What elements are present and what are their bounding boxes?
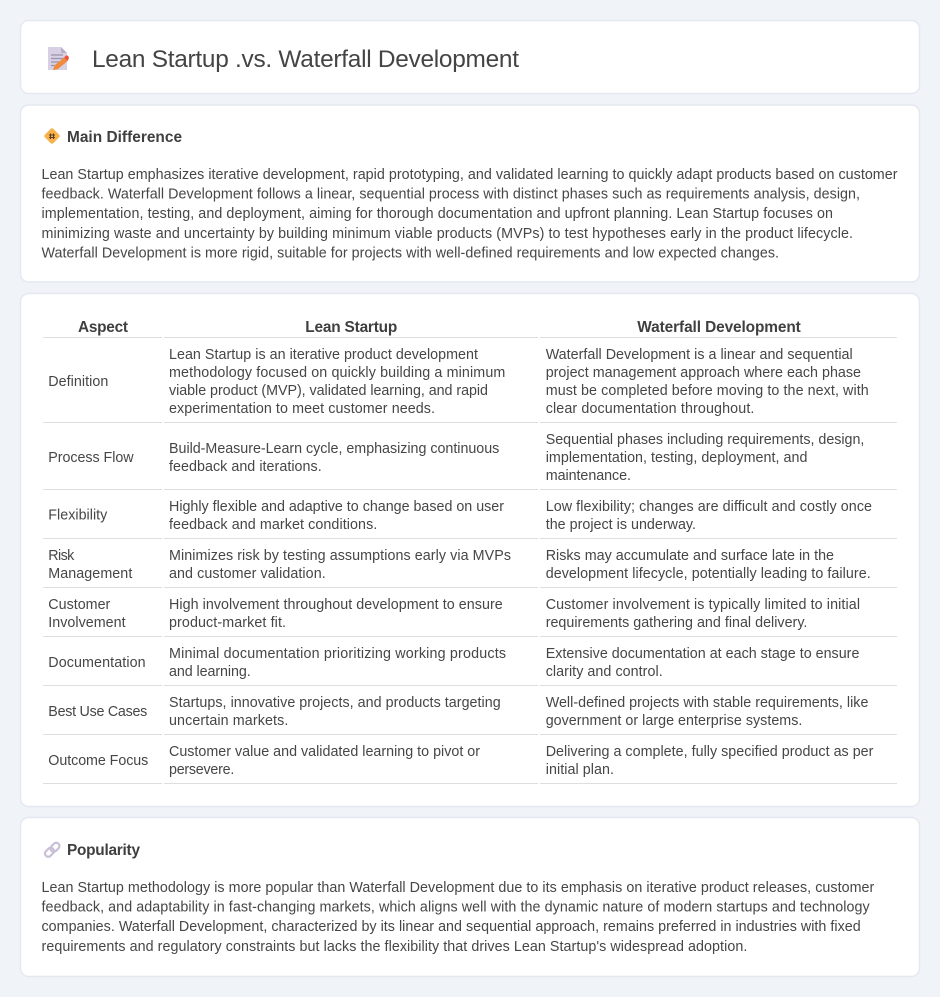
row: customer involvement: product-market fit.	[169, 615, 286, 631]
title: Lean Startup .vs. Waterfall Development	[92, 46, 519, 73]
panel: main difference	[20, 105, 920, 282]
row: documentation: clarity and control.	[546, 664, 663, 680]
row: flexibility: Low flexibility; changes are difficult and costly once	[546, 499, 872, 515]
icon: chain link	[44, 841, 61, 858]
row: definition: viable product (MVP), validated learning, and rapid	[169, 383, 488, 399]
table header row: Aspect	[78, 319, 128, 336]
text block: popularity: Lean Startup methodology is more popular than Waterfall Development due to its emphasis on iterative product releases, customer	[42, 880, 875, 896]
row: risk management: Risk	[48, 548, 75, 564]
row: best use cases	[43, 695, 897, 735]
row: process flow: implementation, testing, deployment, and	[546, 450, 807, 466]
row: documentation: and learning.	[169, 664, 251, 680]
row: risk management: and customer validation.	[169, 566, 326, 582]
row: definition: Lean Startup is an iterative product development	[169, 347, 478, 363]
row: risk management	[43, 548, 897, 588]
row: outcome focus	[43, 744, 897, 784]
text block: popularity	[42, 880, 875, 955]
row: flexibility: Highly flexible and adaptive to change based on user	[169, 499, 504, 515]
row: customer involvement: Involvement	[48, 615, 126, 631]
text block: main difference: implementation, testing, and deployment, aiming for thorough documentation and upfront planning. Lean Startup focuses on	[42, 206, 833, 222]
row: definition: clear documentation throughout.	[546, 401, 754, 417]
text block: popularity: companies. Waterfall Development, characterized by its linear and sequential approach, remains preferred in industries with fixed	[42, 919, 861, 935]
row: definition	[43, 347, 897, 423]
row: definition: methodology focused on quickly building a minimum	[169, 365, 505, 381]
row: best use cases: Best Use Cases	[48, 704, 147, 720]
icon: orange diamond	[44, 128, 60, 144]
heading: popularity: Popularity	[67, 842, 140, 859]
row: best use cases: government or large enterprise systems.	[546, 713, 802, 729]
icon: document with pencil	[48, 47, 69, 70]
row: process flow: Sequential phases including requirements, design,	[546, 432, 864, 448]
row: outcome focus: initial plan.	[546, 762, 614, 778]
row: outcome focus: Delivering a complete, fully specified product as per	[546, 744, 874, 760]
row: outcome focus: Customer value and validated learning to pivot or	[169, 744, 480, 760]
text block: main difference: minimizing waste and uncertainty by building minimum viable products (MVPs) to test hypotheses early in the product lifecycle.	[42, 226, 853, 242]
row: outcome focus: Outcome Focus	[48, 753, 148, 769]
row: best use cases: Well-defined projects with stable requirements, like	[546, 695, 868, 711]
table header row	[43, 319, 897, 338]
text block: main difference: Lean Startup emphasizes iterative development, rapid prototyping, and validated learning to quickly adapt products based on customer	[42, 167, 898, 183]
row: best use cases: Startups, innovative projects, and products targeting	[169, 695, 501, 711]
row: flexibility: feedback and market conditions.	[169, 517, 377, 533]
row: risk management: development lifecycle, potentially leading to failure.	[546, 566, 871, 582]
row: process flow	[43, 432, 897, 490]
table header row: Lean Startup	[305, 319, 397, 336]
row: flexibility: Flexibility	[48, 508, 108, 524]
panel: comparison table	[20, 294, 920, 806]
text block: popularity: requirements and regulatory constraints but lacks the flexibility that drives Lean Startup's widespread adoption.	[42, 939, 747, 955]
row: flexibility	[43, 499, 897, 539]
row: documentation: Extensive documentation at each stage to ensure	[546, 646, 859, 662]
row: customer involvement: Customer involvement is typically limited to initial	[546, 597, 860, 613]
row: definition: project management approach where each phase	[546, 365, 861, 381]
row: customer involvement: Customer	[48, 597, 111, 613]
row: risk management: Risks may accumulate and surface late in the	[546, 548, 834, 564]
row: documentation	[43, 646, 897, 686]
row: process flow: Process Flow	[48, 450, 134, 466]
row: customer involvement: requirements gathering and final delivery.	[546, 615, 807, 631]
row: definition: must be completed before moving to the next, with	[546, 383, 869, 399]
row: definition: Waterfall Development is a linear and sequential	[546, 347, 853, 363]
row: process flow: Build-Measure-Learn cycle, emphasizing continuous	[169, 441, 499, 457]
text block: main difference	[42, 167, 898, 261]
panel: title header	[20, 20, 920, 94]
row: process flow: feedback and iterations.	[169, 459, 322, 475]
row: process flow: maintenance.	[546, 468, 631, 484]
text block: main difference: feedback. Waterfall Development follows a linear, sequential process with distinct phases such as requirements analysis, design,	[42, 187, 860, 203]
row: best use cases: uncertain markets.	[169, 713, 288, 729]
heading: main difference: Main Difference	[67, 129, 182, 146]
row: documentation: Minimal documentation prioritizing working products	[169, 646, 506, 662]
text block: main difference: Waterfall Development is more rigid, suitable for projects with well-defined requirements and low expected changes.	[42, 245, 779, 261]
row: risk management: Management	[48, 566, 132, 582]
table header row: Waterfall Development	[637, 319, 801, 336]
row: customer involvement	[43, 597, 897, 637]
row: flexibility: the project is underway.	[546, 517, 696, 533]
row: definition: experimentation to meet customer needs.	[169, 401, 435, 417]
row: outcome focus: persevere.	[169, 762, 234, 778]
text block: popularity: feedback, and adaptability in fast-changing markets, which aligns well with the dynamic nature of modern startups and technology	[42, 900, 871, 916]
row: documentation: Documentation	[48, 655, 146, 671]
panel: popularity	[20, 818, 920, 976]
row: definition: Definition	[48, 374, 108, 390]
row: customer involvement: High involvement throughout development to ensure	[169, 597, 503, 613]
row: risk management: Minimizes risk by testing assumptions early via MVPs	[169, 548, 511, 564]
